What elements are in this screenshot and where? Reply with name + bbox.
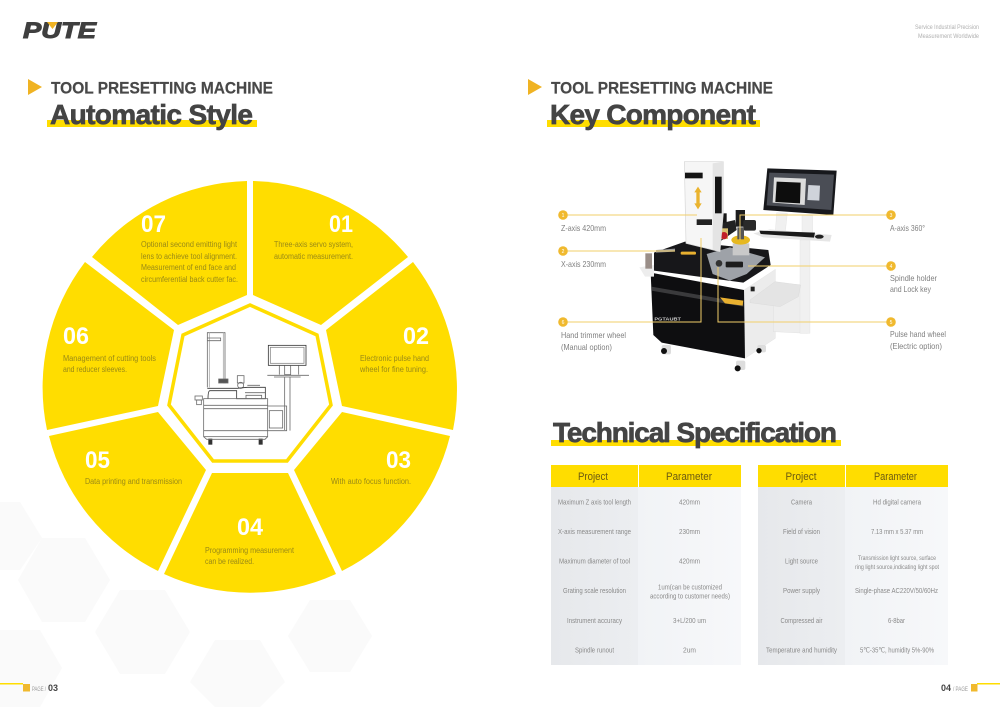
table 1: Maximum Z axis tool length bbox=[558, 498, 631, 506]
segment 06: and reducer sleeves. bbox=[63, 365, 127, 374]
segment 04: can be realized. bbox=[205, 557, 254, 566]
callout 5: pulse hand wheel: 5 bbox=[890, 320, 893, 326]
control buttons bbox=[716, 260, 722, 267]
segment 01: 01 bbox=[329, 211, 353, 238]
table 2: Hd digital camera bbox=[873, 498, 922, 506]
segment 05: 05 bbox=[85, 447, 110, 474]
table 2: Project bbox=[786, 471, 816, 483]
table 1: Grating scale resolution bbox=[563, 586, 626, 595]
table 1: Maximum diameter of tool bbox=[559, 556, 630, 566]
callout 2: x-axis: 2 bbox=[562, 249, 565, 255]
segment 04: Programming measurement bbox=[205, 546, 295, 555]
table 2: Single-phase AC220V/50/60Hz bbox=[855, 586, 938, 595]
callout 4: spindle holder: and Lock key bbox=[890, 284, 932, 294]
heading: technical specification: Technical Specification bbox=[553, 417, 837, 448]
machine photo: PGTAUBT bbox=[654, 317, 681, 322]
segment 07: Measurement of end face and bbox=[141, 263, 236, 272]
table 2: Parameter bbox=[874, 471, 917, 483]
heading: automatic style: TOOL PRESETTING MACHINE bbox=[51, 80, 273, 98]
callout 1: z-axis: Z-axis 420mm bbox=[561, 223, 606, 233]
logo: PUTE bbox=[23, 18, 98, 43]
heading: automatic style bbox=[28, 79, 273, 130]
segment 03: 03 bbox=[386, 447, 411, 474]
segment 07: Optional second emitting light bbox=[141, 240, 238, 249]
heading: key component bbox=[528, 79, 773, 130]
table 2: Power supply bbox=[783, 586, 820, 595]
monitor pole bbox=[800, 240, 810, 333]
callout 6: hand trimmer wheel bbox=[558, 238, 701, 352]
monitor bbox=[763, 168, 837, 215]
monitor supports bbox=[775, 213, 787, 232]
segment 03: With auto focus function. bbox=[331, 477, 411, 486]
segment 02 bbox=[326, 262, 457, 430]
footer: page 04: 04 bbox=[941, 683, 951, 693]
table 2: 7.13 mm x 5.37 mm bbox=[871, 527, 923, 536]
footer: page 04: / PAGE bbox=[953, 687, 968, 693]
segment 05 bbox=[49, 412, 206, 571]
column arm bbox=[715, 213, 727, 230]
column bbox=[684, 162, 723, 252]
segment 05: Data printing and transmission bbox=[85, 477, 182, 486]
segment 04 bbox=[164, 473, 336, 593]
segment 07: 07 bbox=[141, 211, 166, 238]
wheel diagram: seven features bbox=[43, 181, 457, 593]
heading: automatic style: Automatic Style bbox=[50, 99, 253, 130]
callout 3: a-axis bbox=[740, 210, 925, 240]
tagline bbox=[915, 24, 979, 40]
segment 03 bbox=[294, 412, 450, 571]
segment 01: automatic measurement. bbox=[274, 252, 353, 261]
top deck bbox=[654, 242, 771, 283]
table 2: 6-8bar bbox=[888, 616, 905, 625]
table 2: Light source bbox=[785, 556, 818, 566]
footer: page 04 bbox=[941, 683, 1000, 693]
callout 5: pulse hand wheel: (Electric option) bbox=[890, 341, 942, 351]
segment 06: 06 bbox=[63, 323, 89, 350]
table 2 bbox=[758, 465, 948, 665]
table 1: 1um(can be customized bbox=[658, 582, 722, 592]
segment 07 bbox=[92, 181, 247, 325]
table 2: Transmission light source, surface bbox=[858, 555, 936, 562]
footer: page 03: PAGE / bbox=[32, 687, 46, 693]
table 1: 2um bbox=[683, 646, 696, 654]
table 2: Field of vision bbox=[783, 527, 820, 536]
table 1: 230mm bbox=[679, 527, 700, 536]
table 1: 420mm bbox=[679, 498, 700, 506]
spindle bbox=[733, 243, 749, 255]
footer: page 03 bbox=[0, 683, 58, 693]
table 2: Compressed air bbox=[780, 616, 823, 625]
pull-out shelf bbox=[750, 282, 801, 307]
table 2: Camera bbox=[791, 498, 813, 506]
segment 01 bbox=[253, 181, 408, 325]
callout 5: pulse hand wheel bbox=[718, 267, 946, 351]
table 1: 420mm bbox=[679, 556, 700, 566]
table 2: 5℃-35℃, humidity 5%-90% bbox=[860, 646, 934, 654]
callout 2: x-axis bbox=[558, 246, 675, 269]
table 2: ring light source,indicating light spot bbox=[855, 564, 939, 571]
table 1: X-axis measurement range bbox=[558, 527, 631, 536]
cabinet side bbox=[744, 269, 775, 358]
table 1: Instrument accuracy bbox=[567, 616, 622, 625]
table 2: Temperature and humidity bbox=[766, 646, 837, 654]
table 1 bbox=[551, 465, 741, 665]
segment 02: Electronic pulse hand bbox=[360, 354, 429, 363]
machine photo bbox=[639, 162, 837, 371]
lower side cabinet bbox=[773, 283, 807, 333]
callout 6: hand trimmer wheel: 6 bbox=[562, 320, 565, 326]
cabinet front bbox=[651, 273, 745, 358]
callout 1: z-axis: 1 bbox=[562, 213, 565, 219]
callout 6: hand trimmer wheel: Hand trimmer wheel bbox=[561, 330, 626, 340]
tagline: Measurement Worldwide bbox=[918, 33, 979, 40]
callout 3: a-axis: A-axis 360° bbox=[890, 223, 925, 233]
segment 06 bbox=[43, 262, 174, 430]
table 1: 3+L/200 um bbox=[673, 616, 706, 625]
segment 02: 02 bbox=[403, 323, 429, 350]
tagline: Service Industrial Precision bbox=[915, 24, 979, 31]
keyboard shelf bbox=[753, 229, 832, 242]
heading: key component: Key Component bbox=[550, 99, 756, 130]
table 1: Parameter bbox=[666, 471, 712, 483]
callout 6: hand trimmer wheel: (Manual option) bbox=[561, 342, 612, 352]
segment 07: circumferential back cutter fac. bbox=[141, 275, 238, 284]
table 1: Project bbox=[578, 471, 608, 483]
table 1: according to customer needs) bbox=[650, 592, 730, 600]
z arrow bbox=[694, 187, 702, 209]
centre heptagon outline bbox=[169, 305, 331, 461]
segment 04: 04 bbox=[237, 514, 264, 541]
callout 4: spindle holder: Spindle holder bbox=[890, 273, 937, 283]
callout 1: z-axis bbox=[558, 210, 697, 233]
callout 3: a-axis: 3 bbox=[890, 213, 893, 219]
machine line drawing bbox=[195, 333, 309, 445]
tool tray bbox=[639, 265, 654, 277]
segment 02: wheel for fine tuning. bbox=[359, 365, 428, 374]
segment 07: lens to achieve tool alignment. bbox=[141, 252, 237, 261]
callout 4: spindle holder: 4 bbox=[890, 264, 893, 270]
segment 01: Three-axis servo system, bbox=[274, 240, 353, 249]
callout 2: x-axis: X-axis 230mm bbox=[561, 259, 606, 269]
callout 4: spindle holder bbox=[748, 261, 937, 294]
casters bbox=[662, 345, 671, 354]
segment 06: Management of cutting tools bbox=[63, 354, 156, 363]
heading: key component: TOOL PRESETTING MACHINE bbox=[551, 80, 773, 98]
callout 5: pulse hand wheel: Pulse hand wheel bbox=[890, 329, 946, 339]
table 1: Spindle runout bbox=[575, 646, 615, 654]
footer: page 03: 03 bbox=[48, 683, 58, 693]
